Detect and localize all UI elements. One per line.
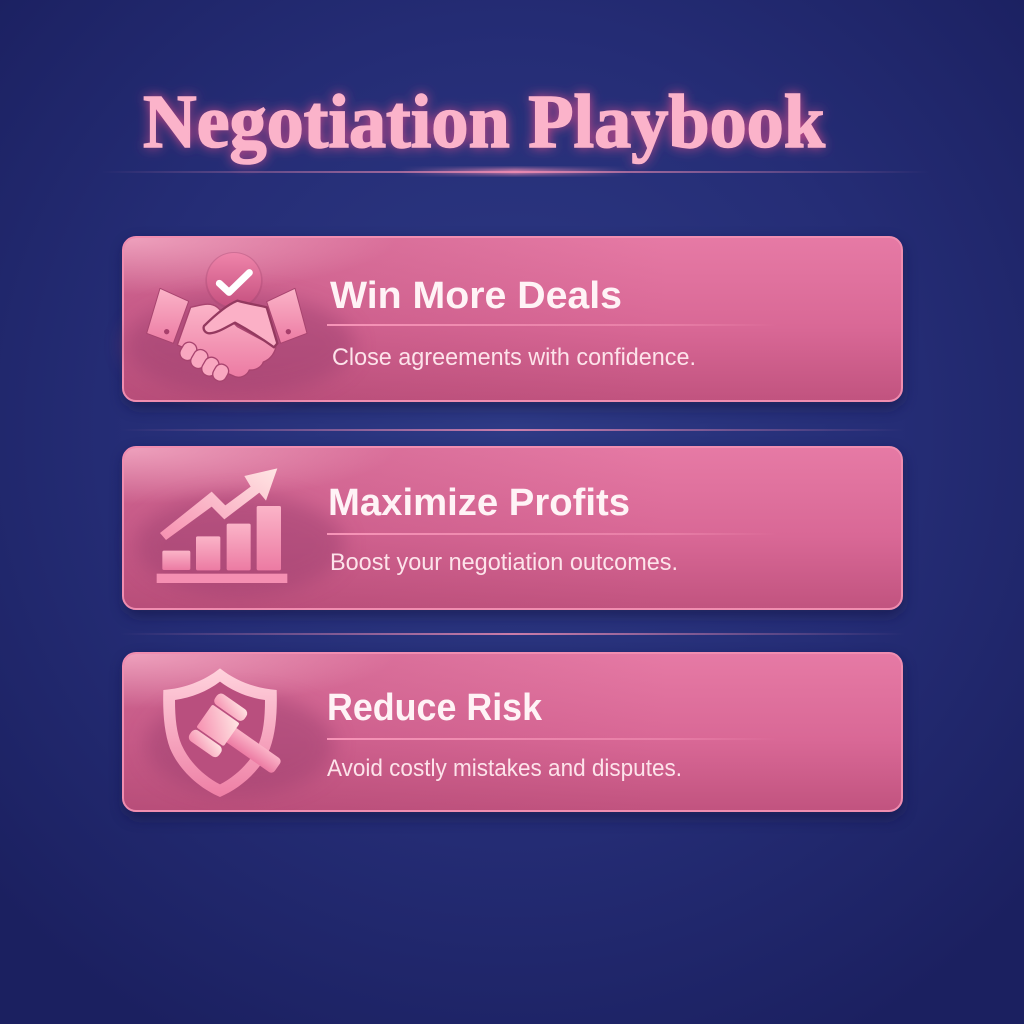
heading: Reduce Risk	[327, 687, 543, 729]
description: Close agreements with confidence.	[332, 344, 696, 371]
title: Negotiation Playbook	[143, 80, 826, 164]
title: Negotiation Playbook	[143, 80, 826, 164]
icon: rising bar chart	[157, 468, 287, 583]
panel: reduce risk	[123, 653, 903, 818]
panel: maximize profits	[123, 447, 903, 616]
description: Boost your negotiation outcomes.	[330, 549, 678, 576]
description: Avoid costly mistakes and disputes.	[327, 755, 682, 782]
icon: shield with gavel	[163, 668, 294, 797]
icon: handshake with check	[147, 252, 307, 384]
heading: Win More Deals	[330, 275, 622, 317]
heading: Maximize Profits	[328, 482, 630, 524]
panel: win more deals	[123, 237, 903, 408]
